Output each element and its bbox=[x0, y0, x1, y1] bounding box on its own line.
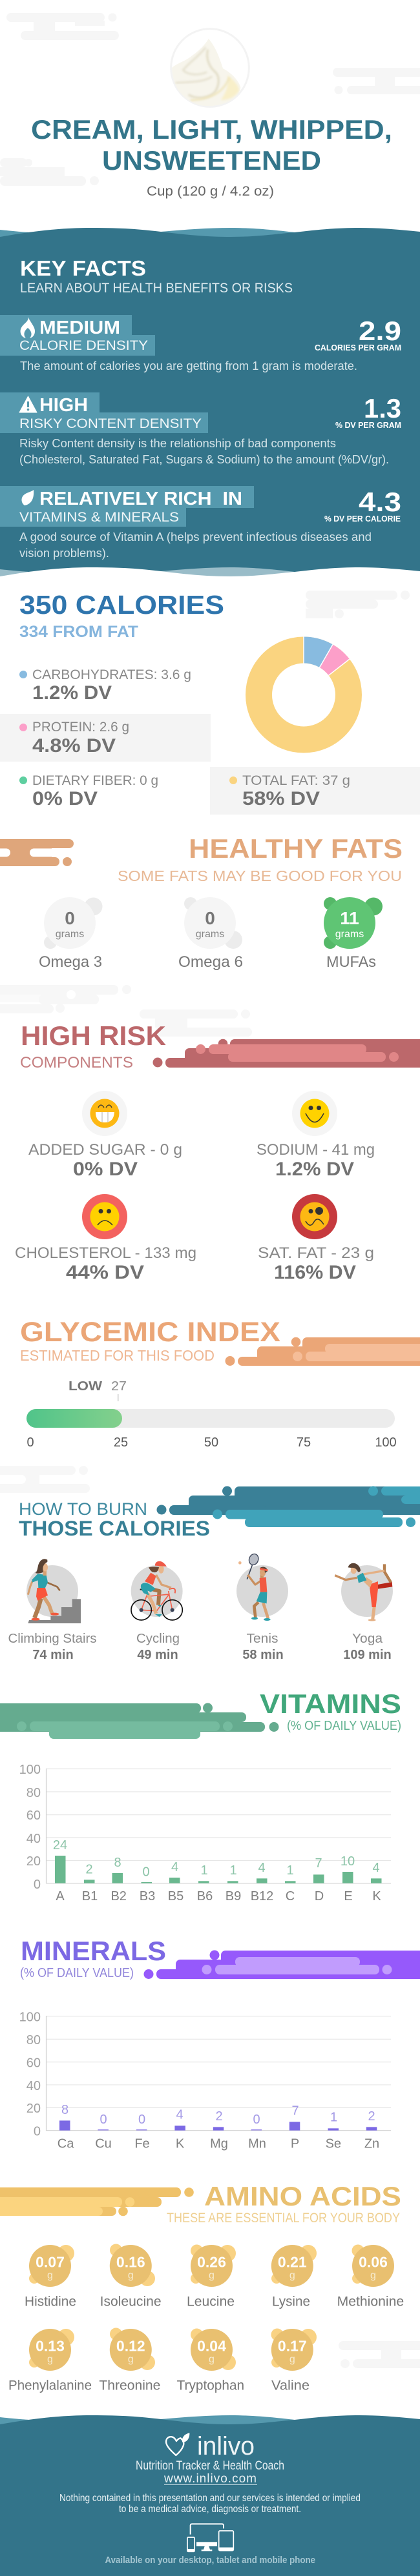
amino: histidine bbox=[25, 2245, 76, 2309]
fact: vitamins and minerals bbox=[0, 486, 401, 560]
bar chart: minerals: 1 bbox=[330, 2111, 337, 2125]
item: omega 3: 0 bbox=[65, 908, 75, 928]
panel: healthy fats bbox=[0, 833, 403, 971]
bar chart: vitamins: 2 bbox=[85, 1863, 93, 1877]
heading: healthy fats: HEALTHY FATS bbox=[189, 833, 403, 864]
bar chart: minerals: 60 bbox=[26, 2056, 41, 2071]
bar chart: vitamins: K bbox=[372, 1889, 381, 1903]
item: saturated fat bbox=[258, 1194, 374, 1283]
description: vitamins and minerals bbox=[19, 531, 372, 560]
marker: low 27 bbox=[68, 1379, 127, 1401]
amino: tryptophan: Tryptophan bbox=[177, 2378, 244, 2393]
bar chart: minerals bbox=[19, 2010, 391, 2151]
value: 109 min: 109 min bbox=[343, 1648, 392, 1662]
legend: total fat: TOTAL FAT: 37 g bbox=[242, 773, 350, 788]
label: high: HIGH bbox=[39, 395, 88, 416]
bar chart: minerals: 80 bbox=[26, 2033, 41, 2047]
logo: inlivo bbox=[166, 2432, 255, 2460]
bar chart: vitamins: B2 bbox=[110, 1889, 127, 1903]
legend: protein: PROTEIN: 2.6 g bbox=[32, 720, 129, 735]
bar chart: vitamins: 4 bbox=[372, 1861, 380, 1875]
amino: leucine bbox=[187, 2245, 236, 2309]
legend: protein bbox=[0, 714, 211, 762]
bar chart: minerals: Cu bbox=[95, 2137, 112, 2151]
serving size: Cup (120 g / 4.2 oz) bbox=[147, 184, 274, 199]
heading: how to burn: HOW TO BURN bbox=[19, 1499, 147, 1519]
subheading: healthy fats: SOME FATS MAY BE GOOD FOR YOU bbox=[118, 867, 402, 884]
subheading: estimated for this food: ESTIMATED FOR THIS FOOD bbox=[20, 1347, 215, 1364]
decorative bars: glycemic bbox=[225, 1337, 420, 1366]
amino: isoleucine: Isoleucine bbox=[100, 2295, 162, 2309]
bar chart: minerals: 4 bbox=[176, 2108, 184, 2122]
amino: lysine: Lysine bbox=[272, 2295, 310, 2309]
disclaimer: to be a medical advice, diagnosis or treatment. bbox=[119, 2504, 301, 2515]
bar chart: vitamins: B6 bbox=[197, 1889, 213, 1903]
legend: total fat: 58% DV bbox=[242, 788, 320, 809]
bar chart: minerals: 0 bbox=[100, 2113, 107, 2127]
icon: devices bbox=[187, 2524, 233, 2551]
bar chart: vitamins: 1 bbox=[286, 1863, 294, 1878]
disclaimer: Nothing contained in this presentation and our services is intended or implied bbox=[59, 2493, 361, 2504]
amino: phenylalanine: 0.13 bbox=[36, 2338, 65, 2355]
decorative bars: healthy fats bbox=[0, 839, 74, 866]
decorative bars: amino acids bbox=[0, 2187, 194, 2216]
icon: sick face bbox=[292, 1194, 337, 1239]
caption: available on devices: Available on your desktop, tablet and mobile phone bbox=[105, 2555, 315, 2566]
fact: calorie density bbox=[0, 315, 401, 372]
legend: carbohydrates: CARBOHYDRATES: 3.6 g bbox=[32, 667, 191, 682]
item: omega 3: Omega 3 bbox=[39, 953, 102, 971]
legend: protein: 4.8% DV bbox=[32, 735, 116, 756]
icon: flame bbox=[21, 317, 35, 338]
logo: inlivo: inlivo bbox=[197, 2432, 255, 2460]
bar chart: minerals: 7 bbox=[291, 2104, 299, 2118]
bar chart: vitamins: 24 bbox=[53, 1838, 67, 1852]
amino: methionine: Methionine bbox=[337, 2295, 404, 2309]
icon: smiling face bbox=[292, 1091, 337, 1136]
scale: glycemic ticks: 25 bbox=[114, 1435, 128, 1450]
label: relatively rich in: RELATIVELY RICH IN bbox=[39, 489, 242, 509]
background cloud: amino acids bbox=[339, 2341, 420, 2368]
legend: dietary fiber: 0% DV bbox=[32, 788, 98, 809]
heading: key facts: KEY FACTS bbox=[20, 256, 146, 280]
subheading: 334 from fat: 334 FROM FAT bbox=[19, 623, 138, 641]
amino: phenylalanine: Phenylalanine bbox=[8, 2378, 92, 2393]
item: mufas: grams bbox=[335, 929, 364, 940]
tagline: Nutrition Tracker & Health Coach bbox=[136, 2459, 284, 2473]
scale: glycemic ticks bbox=[26, 1435, 397, 1450]
stat: 1.3 percent dv per gram bbox=[335, 393, 401, 430]
bar chart: vitamins: B3 bbox=[140, 1889, 155, 1903]
wave: footer top bbox=[0, 2415, 420, 2435]
description: vitamins and minerals: vision problems). bbox=[19, 547, 109, 560]
description: risky content: Risky Content density is the relationship of bad components bbox=[19, 437, 336, 450]
bar chart: minerals: Mg bbox=[210, 2137, 228, 2151]
fact: risky content density bbox=[0, 392, 401, 466]
stat: 1.3 percent dv per gram: 1.3 bbox=[364, 393, 401, 423]
decorative bars: minerals bbox=[143, 1951, 420, 1979]
bar chart: vitamins: 1 bbox=[229, 1863, 237, 1878]
bar chart: minerals: 20 bbox=[26, 2102, 41, 2116]
heading: glycemic index: GLYCEMIC INDEX bbox=[20, 1317, 280, 1348]
bar chart: minerals: Fe bbox=[134, 2137, 150, 2151]
icon: frowning face bbox=[82, 1194, 127, 1239]
bar chart: vitamins: 40 bbox=[26, 1832, 41, 1846]
background clouds: header bbox=[0, 13, 420, 186]
subheading: key facts: LEARN ABOUT HEALTH BENEFITS OR RISKS bbox=[20, 281, 293, 296]
bar chart: minerals: P bbox=[291, 2137, 299, 2151]
bar chart: minerals: Se bbox=[326, 2137, 341, 2151]
background clouds: high risk bbox=[0, 985, 252, 1037]
amino: valine: Valine bbox=[271, 2378, 310, 2393]
heading: amino acids: AMINO ACIDS bbox=[204, 2181, 401, 2211]
amino: histidine: 0.07 bbox=[36, 2254, 65, 2271]
amino: phenylalanine bbox=[8, 2329, 92, 2393]
title bbox=[31, 114, 392, 176]
amino: lysine bbox=[271, 2245, 317, 2309]
panel: calories bbox=[0, 590, 420, 815]
title: CREAM, LIGHT, WHIPPED, bbox=[31, 114, 392, 145]
item: mufas bbox=[324, 897, 383, 971]
label: tennis: Tenis bbox=[247, 1632, 278, 1646]
heading: 350 calories: 350 CALORIES bbox=[19, 590, 224, 620]
bar chart: vitamins: C bbox=[286, 1889, 295, 1903]
bar chart: vitamins: 80 bbox=[26, 1786, 41, 1800]
chart: macronutrient donut bbox=[246, 636, 362, 753]
amino: leucine: Leucine bbox=[187, 2295, 235, 2309]
bar chart: vitamins: 20 bbox=[26, 1854, 41, 1869]
description: vitamins and minerals: A good source of Vitamin A (helps prevent infectious diseases and bbox=[19, 531, 372, 543]
label: yoga: Yoga bbox=[352, 1632, 383, 1646]
item: mufas: MUFAs bbox=[326, 953, 376, 971]
item: omega 6: 0 bbox=[205, 908, 215, 928]
amino: valine: g bbox=[289, 2354, 295, 2365]
background cloud: burn bbox=[0, 1466, 90, 1493]
bar chart: vitamins: 10 bbox=[341, 1854, 355, 1869]
amino: histidine: Histidine bbox=[25, 2295, 76, 2309]
item: mufas: 11 bbox=[340, 908, 359, 928]
chart: glycemic bar bbox=[26, 1409, 395, 1428]
activity: climbing stairs bbox=[8, 1559, 97, 1662]
heading: minerals: MINERALS bbox=[21, 1936, 166, 1966]
activity: yoga bbox=[335, 1563, 393, 1662]
wave: bottom of key facts bbox=[0, 567, 420, 587]
bar chart: vitamins: 8 bbox=[114, 1856, 121, 1870]
value: 49 min: 49 min bbox=[137, 1648, 178, 1662]
panel: amino acids bbox=[0, 2181, 420, 2393]
disclaimer bbox=[59, 2493, 361, 2515]
amino: isoleucine: g bbox=[128, 2270, 134, 2281]
panel: vitamins bbox=[0, 1689, 401, 1903]
amino: lysine: g bbox=[289, 2270, 295, 2281]
bar chart: minerals: 2 bbox=[215, 2109, 223, 2124]
legend: total fat bbox=[210, 767, 420, 815]
subheading: percent of daily value: (% OF DAILY VALUE) bbox=[20, 1966, 134, 1980]
bar chart: vitamins: 1 bbox=[200, 1863, 208, 1878]
amino: leucine: 0.26 bbox=[197, 2254, 226, 2271]
item: omega 3 bbox=[39, 897, 102, 971]
bar chart: vitamins: 4 bbox=[258, 1861, 266, 1875]
scale: glycemic ticks: 75 bbox=[297, 1435, 311, 1450]
label: vitamins and minerals: VITAMINS & MINERALS bbox=[19, 510, 179, 525]
food image: whipped cream in circle bbox=[171, 29, 249, 106]
bar chart: vitamins: B5 bbox=[168, 1889, 184, 1903]
panel: glycemic index bbox=[20, 1317, 420, 1450]
amino: methionine: g bbox=[370, 2270, 376, 2281]
legend: carbohydrates bbox=[19, 667, 191, 704]
item: added sugar: ADDED SUGAR - 0 g bbox=[28, 1141, 182, 1159]
amino: isoleucine bbox=[100, 2244, 162, 2309]
item: added sugar: 0% DV bbox=[73, 1159, 138, 1180]
item: cholesterol: CHOLESTEROL - 133 mg bbox=[15, 1244, 196, 1262]
stat: 4.3 percent dv per calorie: 4.3 bbox=[359, 487, 401, 517]
item: saturated fat: SAT. FAT - 23 g bbox=[258, 1244, 374, 1262]
amino: valine: 0.17 bbox=[278, 2338, 307, 2355]
item: omega 6: grams bbox=[196, 929, 224, 940]
amino: histidine: g bbox=[47, 2270, 53, 2281]
heading: high risk: HIGH RISK bbox=[21, 1020, 166, 1051]
item: cholesterol: 44% DV bbox=[66, 1262, 144, 1283]
bar chart: vitamins: 7 bbox=[315, 1856, 322, 1871]
amino: threonine bbox=[99, 2328, 160, 2393]
description: risky content: (Cholesterol, Saturated Fat, Sugars & Sodium) to the amount (%DV/gr). bbox=[19, 453, 389, 466]
illustration: woman climbing stairs bbox=[26, 1559, 81, 1623]
amino: tryptophan bbox=[177, 2329, 244, 2393]
illustration: yoga pose bbox=[335, 1563, 393, 1621]
illustration: tennis player bbox=[236, 1552, 288, 1621]
description: risky content bbox=[19, 437, 389, 466]
bar chart: minerals: Ca bbox=[58, 2137, 74, 2151]
illustration: cyclist bbox=[131, 1561, 183, 1620]
amino: threonine: g bbox=[128, 2354, 134, 2365]
bar chart: minerals: 0 bbox=[253, 2113, 260, 2127]
bar chart: vitamins bbox=[19, 1763, 391, 1903]
bar chart: vitamins: B12 bbox=[251, 1889, 273, 1903]
amino: threonine: Threonine bbox=[99, 2378, 160, 2393]
value: 58 min: 58 min bbox=[242, 1648, 284, 1662]
bar chart: minerals: Mn bbox=[248, 2137, 266, 2151]
bar chart: vitamins: 100 bbox=[19, 1763, 41, 1777]
bar chart: minerals: 100 bbox=[19, 2010, 41, 2024]
amino: phenylalanine: g bbox=[47, 2354, 53, 2365]
item: added sugar bbox=[28, 1091, 182, 1180]
description: calorie density: The amount of calories you are getting from 1 gram is moderate. bbox=[20, 360, 357, 372]
amino: tryptophan: 0.04 bbox=[197, 2338, 226, 2355]
scale: glycemic ticks: 100 bbox=[375, 1435, 397, 1450]
bar chart: vitamins: B1 bbox=[82, 1889, 98, 1903]
activity: tennis bbox=[236, 1552, 288, 1662]
background cloud: calories bbox=[306, 591, 410, 618]
item: saturated fat: 116% DV bbox=[274, 1262, 356, 1283]
bar chart: vitamins: E bbox=[344, 1889, 353, 1903]
bar chart: minerals: 2 bbox=[368, 2109, 375, 2124]
bar chart: minerals: 8 bbox=[61, 2103, 68, 2117]
stat: 2.9 calories per gram: CALORIES PER GRAM bbox=[315, 343, 401, 352]
bar chart: vitamins: A bbox=[56, 1889, 65, 1903]
item: sodium: SODIUM - 41 mg bbox=[257, 1141, 375, 1159]
stat: 4.3 percent dv per calorie: % DV PER CALORIE bbox=[324, 514, 401, 523]
bar chart: vitamins: 0 bbox=[34, 1878, 41, 1892]
bar chart: minerals: K bbox=[176, 2137, 185, 2151]
panel: how to burn those calories bbox=[0, 1466, 420, 1662]
wave: top of key facts bbox=[0, 228, 420, 247]
bar chart: vitamins: 4 bbox=[171, 1860, 178, 1874]
amino: isoleucine: 0.16 bbox=[116, 2254, 145, 2271]
amino: leucine: g bbox=[209, 2270, 215, 2281]
item: cholesterol bbox=[15, 1194, 196, 1283]
bar chart: vitamins: B9 bbox=[226, 1889, 241, 1903]
label: calorie density: CALORIE DENSITY bbox=[19, 338, 148, 353]
decorative bars: vitamins bbox=[0, 1703, 279, 1739]
bar chart: minerals: 0 bbox=[34, 2125, 41, 2139]
title: UNSWEETENED bbox=[102, 145, 321, 176]
bar chart: vitamins: 0 bbox=[142, 1865, 150, 1880]
legend: dietary fiber bbox=[19, 773, 158, 809]
item: omega 6: Omega 6 bbox=[178, 953, 243, 971]
marker: low 27: LOW bbox=[68, 1379, 102, 1394]
amino: threonine: 0.12 bbox=[116, 2338, 145, 2355]
stat: 1.3 percent dv per gram: % DV PER GRAM bbox=[335, 420, 401, 430]
amino: methionine: 0.06 bbox=[359, 2254, 388, 2271]
bar chart: vitamins: 60 bbox=[26, 1809, 41, 1823]
item: sodium: 1.2% DV bbox=[275, 1159, 354, 1180]
panel: minerals bbox=[19, 1936, 420, 2151]
icon: warning triangle bbox=[19, 396, 37, 412]
bar chart: minerals: Zn bbox=[364, 2137, 379, 2151]
label: risky content density: RISKY CONTENT DENSITY bbox=[19, 416, 202, 431]
bar chart: minerals: 40 bbox=[26, 2079, 41, 2093]
label: cycling: Cycling bbox=[136, 1632, 180, 1646]
icon: grinning face bbox=[82, 1091, 127, 1136]
amino: lysine: 0.21 bbox=[278, 2254, 307, 2271]
bar chart: vitamins: D bbox=[315, 1889, 324, 1903]
bar chart: minerals: 0 bbox=[138, 2113, 145, 2127]
decorative bars: burn bbox=[156, 1486, 420, 1527]
footer bbox=[0, 2415, 420, 2576]
heading: those calories: THOSE CALORIES bbox=[19, 1517, 210, 1540]
legend: dietary fiber: DIETARY FIBER: 0 g bbox=[32, 773, 158, 788]
marker: low 27: 27 bbox=[111, 1379, 127, 1394]
legend: carbohydrates: 1.2% DV bbox=[32, 682, 112, 704]
amino: methionine bbox=[337, 2245, 404, 2309]
label: climbing stairs: Climbing Stairs bbox=[8, 1632, 97, 1646]
heading: vitamins: VITAMINS bbox=[260, 1689, 401, 1719]
scale: glycemic ticks: 0 bbox=[26, 1435, 34, 1450]
item: omega 6 bbox=[178, 897, 243, 971]
item: sodium bbox=[257, 1091, 375, 1180]
subheading: components: COMPONENTS bbox=[20, 1054, 133, 1071]
stat: 2.9 calories per gram bbox=[315, 316, 401, 352]
stat: 4.3 percent dv per calorie bbox=[324, 487, 401, 523]
activity: cycling bbox=[131, 1561, 183, 1662]
panel: key facts bbox=[0, 228, 420, 587]
value: 74 min: 74 min bbox=[32, 1648, 74, 1662]
label: medium: MEDIUM bbox=[39, 318, 120, 338]
item: omega 3: grams bbox=[56, 929, 84, 940]
decorative bars: high risk bbox=[152, 1039, 420, 1068]
amino: tryptophan: g bbox=[209, 2354, 215, 2365]
subheading: percent of daily value: (% OF DAILY VALUE) bbox=[287, 1719, 401, 1733]
scale: glycemic ticks: 50 bbox=[204, 1435, 218, 1450]
stat: 2.9 calories per gram: 2.9 bbox=[359, 316, 401, 346]
website link: www.inlivo.com bbox=[163, 2472, 257, 2486]
icon: leaf bbox=[22, 490, 34, 505]
amino: valine bbox=[271, 2329, 317, 2393]
panel: high risk components bbox=[0, 985, 420, 1283]
